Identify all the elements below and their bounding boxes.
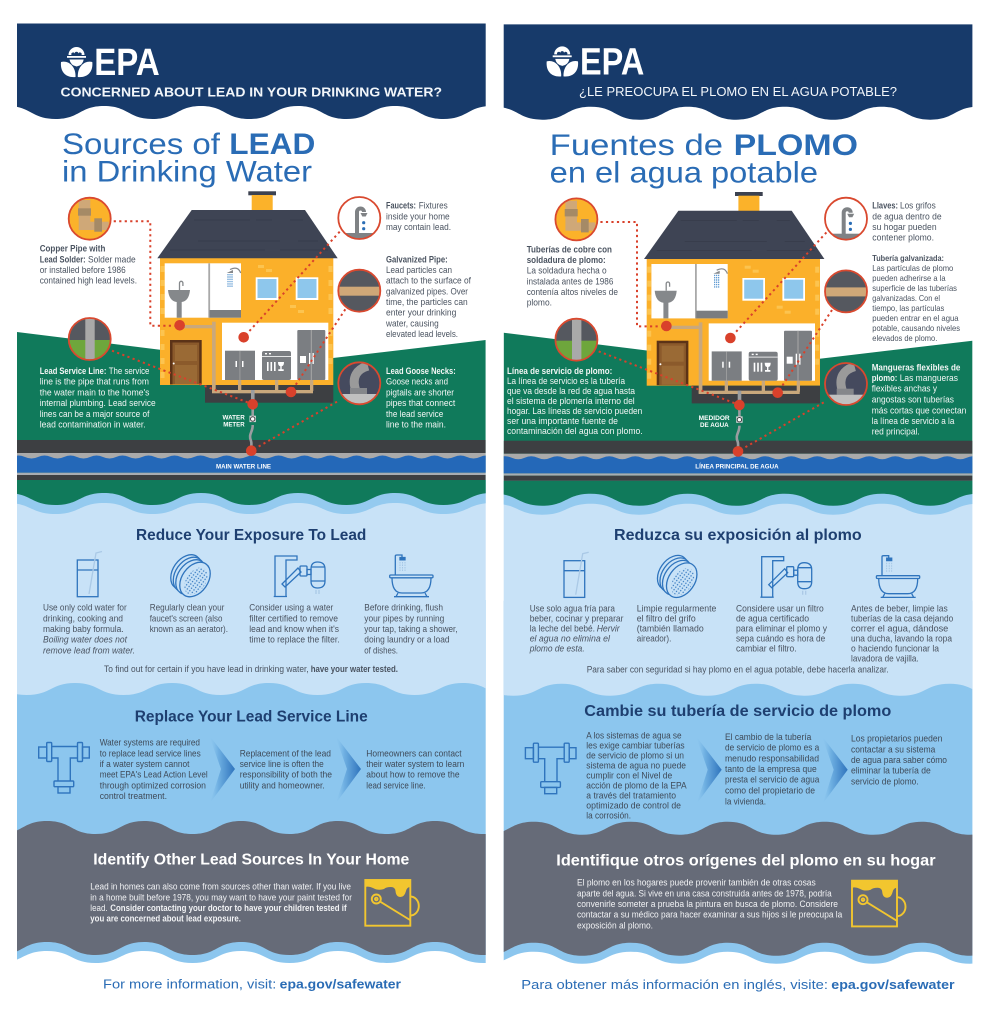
icon: paint can [852, 881, 906, 926]
text: lead service line [40, 366, 156, 430]
text: flushing tip: of dishes. [364, 645, 398, 655]
text: homeowners [366, 748, 464, 790]
text: lead goose necks [386, 366, 456, 430]
callout icon: galvanized pipe [823, 270, 871, 312]
text: tubería galvanizada: pueden entrar en el agua [872, 314, 959, 323]
text: propietarios: de agua para saber cómo [851, 755, 947, 765]
text: línea de servicio [507, 366, 643, 436]
panel background: header, yard, water main and wave sections [465, 24, 986, 964]
text: responsabilidad compartida: la vivienda. [725, 796, 766, 806]
text: lead service line: the water main to the home's [40, 387, 150, 397]
text: flushing tip: your pipes by running [364, 613, 444, 623]
text: llaves: contener plomo. [872, 233, 934, 243]
text: limpie el filtro: (también llamado [637, 623, 704, 633]
text: limpie las tuberías: lavadora de vajilla. [851, 653, 919, 663]
panel: Spanish infographic [465, 24, 986, 992]
text: test your water: have your water tested. [311, 664, 398, 674]
heading: cambie su tubería: Cambie su tubería de servicio de plomo [584, 703, 892, 720]
text: filtro certificado: cambiar el filtro. [736, 643, 797, 653]
text: responsabilidad compartida: de servicio de plomo es a [725, 743, 819, 753]
text: llaves: Llaves: [872, 201, 898, 211]
text: limpie las tuberías: Antes de beber, limpie las [851, 603, 948, 613]
text: galvanized pipe: attach to the surface of [386, 276, 472, 286]
text: propietarios: contactar a su sistema [851, 744, 935, 754]
callout icon: faucet [825, 198, 869, 242]
text: sistemas de agua: sistema de agua no puede [586, 760, 686, 770]
heading: reduzca su exposición: Reduzca su exposición al plomo [614, 527, 862, 544]
text: filtro certificado: de agua certificado [736, 613, 809, 623]
text: lead goose necks: pipes that connect [386, 398, 456, 408]
text: otros orígenes: exposición al plomo. [577, 920, 653, 930]
text: flushing tip: Before drinking, flush [364, 603, 443, 613]
text: otros orígenes: El plomo en los hogares puede provenir también de otras cosas [577, 878, 816, 888]
text: filter tip: filter certified to remove [249, 613, 338, 623]
text: other lead sources: Lead in homes can also come from sources other than water. If you live [90, 881, 351, 891]
text: sistemas de agua: optimizado de control de [586, 800, 681, 810]
heading: replace your lead service line: Replace Your Lead Service Line [135, 708, 368, 725]
panel background: header, yard, water main and wave sections [0, 24, 532, 963]
text: filtro certificado: sepa cuándo es hora de [736, 633, 825, 643]
text: otros orígenes [577, 878, 842, 930]
text: galvanized pipe: time, the particles can [386, 297, 468, 307]
text: agua fría: la leche del bebé. [530, 623, 595, 633]
text: lead service line: Lead Service Line: [40, 366, 106, 376]
text: mangueras flexibles: Las mangueras [900, 373, 959, 383]
text: flushing tip [364, 603, 458, 655]
icon: pipe tee [39, 742, 89, 793]
text: mangueras flexibles: más cortas que conectan [872, 405, 966, 415]
callout icon: lead service line [66, 316, 114, 362]
icon: faucet with filter [760, 557, 812, 597]
dotted connector lines [599, 222, 832, 451]
text: copper pipe with lead solder: contained high lead levels. [40, 276, 137, 286]
text: faucets [386, 201, 451, 232]
text: shared responsibility: utility and homeowner. [240, 780, 325, 790]
heading: reduce your exposure: Reduce Your Exposure To Lead [136, 527, 366, 544]
text: limpie las tuberías: una ducha, lavando la ropa [851, 633, 952, 643]
text: sistemas de agua: cumplir con el Nivel de [586, 770, 672, 780]
text: agua fría [529, 603, 623, 653]
text: propietarios: servicio de plomo. [851, 776, 919, 786]
text: mangueras flexibles: Mangueras flexibles de [872, 362, 960, 372]
lead source markers [661, 321, 783, 457]
text: mangueras flexibles: angostas son tuberías [872, 394, 955, 404]
header question: CONCERNED ABOUT LEAD IN YOUR DRINKING WATER? [60, 84, 442, 100]
callout icon: lead goose neck [336, 362, 384, 406]
text: other lead sources: lead. [90, 903, 108, 913]
text: filter tip [249, 603, 340, 645]
text: shared responsibility: service line is often the [240, 759, 324, 769]
text: limpie el filtro: aireador). [637, 633, 671, 643]
text: homeowners: Homeowners can contact [366, 748, 462, 758]
text: limpie las tuberías: tuberías de la casa dejando [851, 613, 953, 623]
callout icon: lead goose neck [823, 363, 871, 407]
text: faucets: Fixtures [419, 201, 448, 211]
text: análisis del agua: Para saber con seguridad si hay plomo en el agua potable, debe hacerla analizar. [587, 665, 889, 675]
arrow: step one to two [209, 735, 235, 803]
text: limpie las tuberías: o haciendo funcionar la [851, 643, 939, 653]
text: responsabilidad compartida: como del propietario de [725, 785, 815, 795]
text: tuberías de cobre: soldadura de plomo: [527, 255, 606, 265]
text: cold water tip: drinking, cooking and [43, 613, 123, 623]
text: other lead sources: Consider contacting your doctor to have your children tested if [110, 903, 347, 913]
text: water systems requirement [100, 737, 208, 801]
text: flushing tip: doing laundry or a load [364, 635, 450, 645]
text: water systems requirement: Water systems are required [100, 737, 200, 747]
text: cold water tip: remove lead from water. [43, 645, 135, 655]
icon: bathtub with shower [876, 556, 920, 597]
footer link: epa.gov/safewater [280, 976, 401, 991]
callout icon: galvanized pipe [336, 270, 384, 312]
text: cold water tip: Boiling water does not [43, 635, 128, 645]
text: otros orígenes: convenirle someter a prueba la pintura en busca de plomo. Considere [577, 899, 838, 909]
text: lead goose necks: the lead service [386, 409, 443, 419]
text: agua fría: el agua no elimina el [530, 633, 611, 643]
footer link [521, 977, 955, 992]
text: llaves: Los grifos [900, 201, 936, 211]
text: filtro certificado: Considere usar un filtro [736, 603, 824, 613]
footer link: epa.gov/safewater [831, 977, 955, 992]
text: copper pipe with lead solder: Copper Pipe with [40, 244, 105, 254]
text: filtro certificado [736, 603, 828, 653]
icon: glass of water [564, 552, 589, 597]
text: otros orígenes: aparte del agua. Si vive en una casa construida antes de 1978, podría [577, 888, 832, 898]
text: homeowners: their water system to learn [366, 759, 464, 769]
text: tubería galvanizada: elevados de plomo. [872, 334, 937, 343]
text: responsabilidad compartida: presta el servicio de agua [725, 775, 819, 785]
heading: identifique otros orígenes: Identifique otros orígenes del plomo en su hogar [556, 852, 936, 869]
footer link: For more information, visit: [103, 976, 276, 991]
text: mangueras flexibles: flexibles anchas y [872, 384, 938, 394]
text: galvanized pipe: water, causing [385, 318, 439, 328]
text: responsabilidad compartida [725, 732, 819, 806]
text: limpie las tuberías: correr el agua, dándose [851, 623, 948, 633]
text: galvanized pipe: galvanized pipes. Over [386, 286, 468, 296]
callout icon: faucet [338, 197, 382, 241]
text: water systems requirement: meet EPA's Lead Action Level [100, 770, 208, 780]
text: lead service line: lines can be a major source of [40, 409, 150, 419]
text: tuberías de cobre: Tuberías de cobre con [527, 244, 612, 254]
text: water systems requirement: control treatment. [100, 791, 167, 801]
text: tubería galvanizada: tiempo, las partículas [872, 304, 944, 313]
text: limpie el filtro: Limpie regularmente [637, 603, 716, 613]
text: filtro certificado: para eliminar el plomo y [736, 623, 828, 633]
label: medidor de agua: DE AGUA [700, 422, 729, 429]
text: faucets: may contain lead. [386, 222, 451, 232]
text: aerator tip: faucet's screen (also [150, 613, 222, 623]
text: other lead sources [90, 881, 352, 924]
text: línea de servicio: el sistema de plomería interno del [507, 396, 635, 406]
text: aerator tip: known as an aerator). [150, 624, 228, 634]
logo: EPA: EPA [580, 42, 644, 84]
text: cold water tip: making baby formula. [43, 624, 124, 634]
text: water systems requirement: to replace lead service lines [100, 748, 201, 758]
header question: ¿LE PREOCUPA EL PLOMO EN EL AGUA POTABLE? [579, 84, 897, 99]
text: lead service line: line is the pipe that runs from [40, 377, 149, 387]
title: LEAD [229, 128, 315, 161]
text: galvanized pipe: enter your drinking [386, 308, 456, 318]
arrow: step two to three [335, 735, 361, 803]
title: in Drinking Water [62, 156, 312, 189]
text: test your water: To find out for certain if you have lead in drinking water, [104, 664, 309, 674]
text: sistemas de agua: A los sistemas de agua se [586, 730, 682, 740]
text: línea de servicio: La línea de servicio es la tubería [507, 376, 625, 386]
text: llaves: su hogar pueden [872, 222, 937, 232]
callout icon: copper pipe with lead solder [69, 198, 111, 240]
panel: English infographic [0, 24, 532, 991]
text: copper pipe with lead solder: Solder made [88, 254, 136, 264]
text: sistemas de agua: de servicio de plomo si un [586, 750, 684, 760]
text: línea de servicio: que va desde la red de agua hasta [507, 386, 635, 396]
logo: EPA: EPA [94, 42, 160, 84]
text: other lead sources: in a home built before 1978, you may want to have your paint tested for [90, 892, 352, 902]
text: shared responsibility: responsibility of both the [240, 770, 332, 780]
text: sistemas de agua [586, 730, 687, 820]
text: tubería galvanizada: galvanizadas. Con el [872, 294, 940, 303]
label: water meter [222, 414, 245, 428]
text: lead goose necks: Lead Goose Necks: [386, 366, 456, 376]
text: water systems requirement: if a water system cannot [100, 759, 190, 769]
label: línea principal de agua: LÍNEA PRINCIPAL DE AGUA [695, 461, 779, 470]
label: water meter: WATER [222, 414, 245, 421]
text: llaves: de agua dentro de [872, 211, 942, 221]
text: responsabilidad compartida: menudo responsabilidad [725, 753, 819, 763]
footer link [103, 976, 401, 991]
text: agua fría: Use solo agua fría para [530, 603, 615, 613]
text: mangueras flexibles [872, 362, 966, 437]
text: tubería galvanizada [872, 254, 960, 343]
text: other lead sources: you are concerned about lead exposure. [90, 914, 241, 924]
text: tubería galvanizada: pueden adherirse a la [872, 274, 946, 283]
callout icon: lead service line [553, 317, 601, 363]
text: agua fría: plomo de esta. [529, 643, 585, 653]
text: limpie el filtro [637, 603, 716, 643]
label: medidor de agua: MEDIDOR [699, 415, 730, 422]
text: mangueras flexibles: red principal. [872, 427, 920, 437]
text: filter tip: Consider using a water [249, 603, 333, 613]
text: lead service line: lead contamination in water. [40, 420, 146, 430]
text: sistemas de agua: la corrosión. [586, 810, 631, 820]
icon: faucet aerator [164, 549, 217, 603]
text: aerator tip: Regularly clean your [150, 603, 224, 613]
icon: paint can [365, 880, 419, 926]
text: línea de servicio: Línea de servicio de plomo: [507, 366, 612, 376]
text: tuberías de cobre: La soldadura hecha o [527, 266, 607, 276]
text: faucets: Faucets: [386, 201, 416, 211]
icon: faucet with filter [274, 556, 325, 596]
logo: EPA [547, 42, 644, 84]
dotted connector lines [112, 221, 345, 451]
title: Fuentes de [550, 129, 723, 162]
text: galvanized pipe: Lead particles can [386, 265, 452, 275]
arrow: step one to two [696, 736, 722, 804]
text: sistemas de agua: a través del tratamiento [586, 790, 676, 800]
text: mangueras flexibles: plomo: [872, 373, 897, 383]
text: cold water tip [43, 603, 135, 655]
text: lead goose necks: line to the main. [386, 420, 446, 430]
text: tubería galvanizada: superficie de las tuberías [872, 284, 957, 293]
text: limpie el filtro: el filtro del grifo [637, 613, 696, 623]
callout icon: copper pipe with lead solder [555, 198, 597, 240]
icon: pipe tee [525, 743, 576, 794]
text: propietarios: eliminar la tubería de [851, 766, 931, 776]
text: tubería galvanizada: potable, causando niveles [872, 324, 960, 333]
lead source markers [174, 320, 296, 456]
text: agua fría: Hervir [597, 623, 621, 633]
text: homeowners: lead service line. [366, 780, 426, 790]
text: tubería galvanizada: Tubería galvanizada: [872, 254, 944, 263]
icon: faucet aerator [651, 550, 703, 603]
house illustration [157, 191, 338, 451]
text: línea de servicio: hogar. Las líneas de servicio pueden [507, 406, 642, 416]
text: lead goose necks: pigtails are shorter [386, 387, 454, 397]
text: otros orígenes: contactar a su médico para hacer examinar a sus hijos si le preocupa la [577, 910, 842, 920]
title [62, 128, 315, 189]
text: filter tip: time to replace the filter. [249, 635, 340, 645]
text: homeowners: about how to remove the [366, 770, 460, 780]
footer link: Para obtener más información en inglés, visite: [521, 977, 828, 992]
label: medidor de agua [699, 415, 730, 429]
text: galvanized pipe [385, 254, 472, 339]
text: sistemas de agua: acción de plomo de la EPA [586, 780, 687, 790]
icon: bathtub with shower [390, 555, 433, 597]
text: cold water tip: Use only cold water for [43, 603, 127, 613]
label: main water line: MAIN WATER LINE [216, 463, 271, 470]
text: copper pipe with lead solder: or installed before 1986 [40, 265, 126, 275]
text: tubería galvanizada: Las partículas de plomo [872, 264, 954, 273]
label: water meter: METER [223, 421, 245, 428]
title: en el agua potable [550, 156, 818, 189]
text: limpie las tuberías [851, 603, 953, 663]
text: shared responsibility: Replacement of the lead [240, 748, 331, 758]
text: responsabilidad compartida: El cambio de la tubería [725, 732, 811, 742]
text: copper pipe with lead solder: Lead Solder: [40, 254, 86, 264]
text: línea de servicio: contaminación del agua con plomo. [507, 426, 643, 436]
house illustration [644, 192, 824, 452]
text: línea de servicio: ser una importante fuente de [507, 416, 618, 426]
text: mangueras flexibles: la línea de servicio a la [872, 416, 954, 426]
heading: identify other lead sources: Identify Other Lead Sources In Your Home [93, 852, 409, 869]
logo: EPA [61, 42, 160, 84]
text: shared responsibility [240, 748, 332, 790]
text: agua fría: beber, cocinar y preparar [530, 613, 623, 623]
text: water systems requirement: through optimized corrosion [100, 780, 206, 790]
text: aerator tip [150, 603, 228, 634]
text: flushing tip: your tap, taking a shower, [364, 624, 458, 634]
text: tuberías de cobre: instalada antes de 1986 [527, 276, 613, 286]
text: galvanized pipe: Galvanized Pipe: [386, 254, 448, 264]
text: filter tip: lead and know when it's [249, 624, 340, 634]
text: responsabilidad compartida: tanto de la empresa que [725, 764, 817, 774]
icon: glass of water [77, 552, 102, 597]
text: tuberías de cobre [527, 244, 618, 308]
arrow: step two to three [822, 736, 848, 804]
text: llaves [872, 201, 942, 243]
text: copper pipe with lead solder [40, 244, 137, 286]
text: sistemas de agua: les exige cambiar tuberías [586, 740, 685, 750]
title: PLOMO [734, 129, 858, 162]
title: Sources of [62, 128, 221, 161]
text: propietarios: Los propietarios pueden [851, 734, 942, 744]
text: lead goose necks: Goose necks and [386, 377, 448, 387]
text: galvanized pipe: elevated lead levels. [386, 329, 458, 339]
text: tuberías de cobre: plomo. [527, 298, 552, 308]
text: propietarios [851, 734, 947, 786]
text: lead service line: The service [109, 366, 149, 376]
text: lead service line: internal plumbing. Lead service [40, 398, 156, 408]
title [550, 129, 858, 189]
text: faucets: inside your home [386, 211, 450, 221]
text: tuberías de cobre: contenía altos niveles de [527, 287, 618, 297]
